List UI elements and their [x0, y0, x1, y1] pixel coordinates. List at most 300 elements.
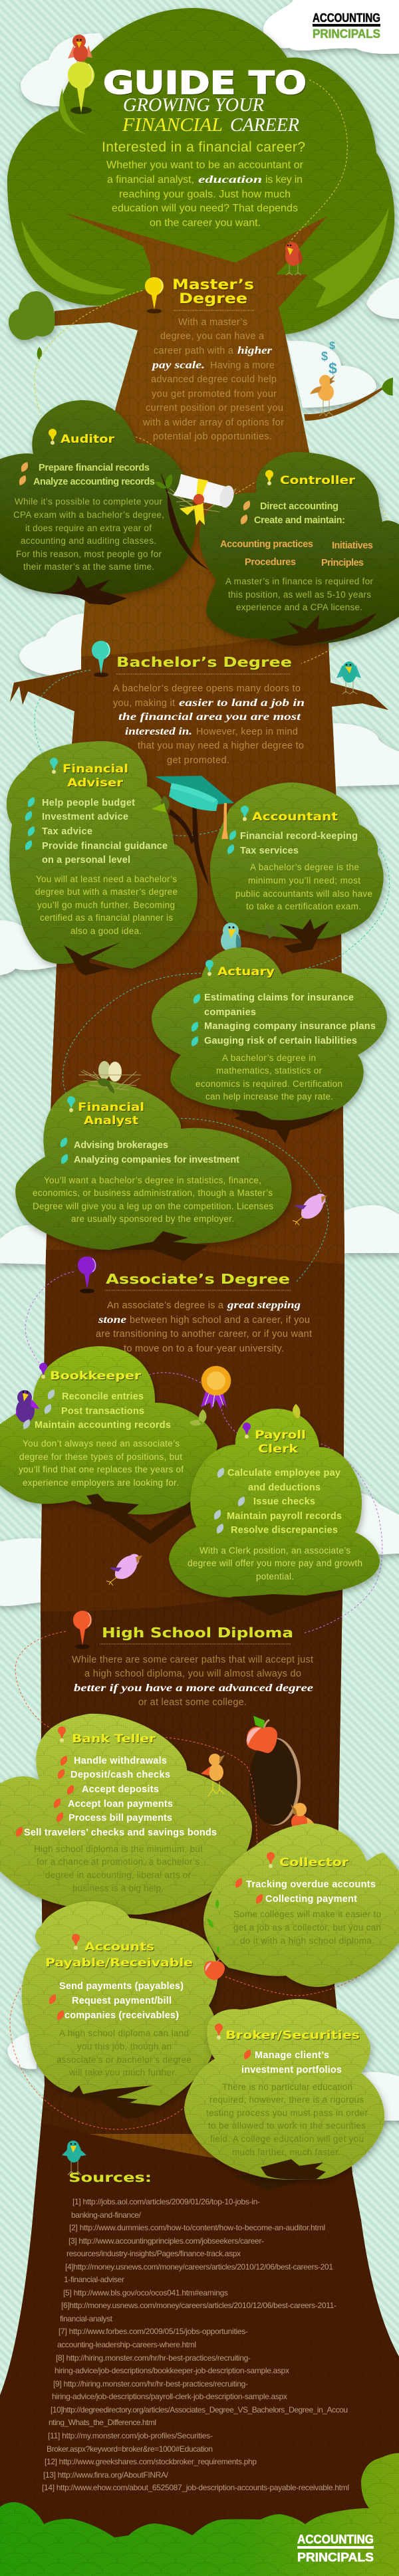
heading: Bachelor’s Degree [116, 654, 292, 670]
body text [113, 683, 305, 766]
icon: purple bird [16, 1390, 40, 1423]
body text: great stepping [227, 1300, 301, 1311]
icon: diploma on nest [155, 474, 236, 525]
sub-items: Principles [321, 558, 364, 568]
logo: bottom: PRINCIPALS [297, 2551, 374, 2564]
body text: public accountants will also have [235, 889, 372, 899]
body text: required; however, there is a rigorous [209, 2095, 364, 2105]
heading: Adviser [67, 776, 124, 790]
body text: interested in. [125, 726, 192, 737]
body text: However, keep in mind [196, 727, 298, 737]
bullets [49, 1981, 184, 2021]
foliage [7, 741, 198, 975]
body text: to move on to a four-year university. [124, 1344, 284, 1354]
heading: High School Diploma [102, 1625, 293, 1641]
text: master's body: With a master’s [178, 317, 247, 328]
icon: teal pin [92, 641, 110, 677]
body text: do it with a high school diploma. [240, 1936, 374, 1946]
heading: Analyst [84, 1114, 138, 1127]
panel: actuary [152, 923, 387, 1143]
foliage [0, 400, 196, 605]
bullets: Collecting payment [265, 1894, 357, 1905]
sources list: banking-and-finance/ [71, 2210, 142, 2220]
bird: teal on bush [221, 923, 241, 952]
sub-items: Accounting practices [220, 539, 313, 550]
sources list: financial-analyst [60, 2314, 113, 2323]
body text: to be allowed to work in the securities [208, 2121, 366, 2131]
sources list: [9] http://hiring.monster.com/hr/hr-best-practices/recruiting- [53, 2379, 248, 2389]
sources list: nting_Whats_the_Difference.html [49, 2418, 156, 2427]
canopy: top tree foliage [7, 8, 394, 334]
icon: small orange pin [267, 1852, 275, 1868]
body text: experience employers are looking for. [23, 1478, 179, 1488]
heading: Bank Teller [72, 1732, 156, 1745]
leaves [190, 1409, 206, 1425]
sources list [42, 2197, 349, 2492]
sub-items [220, 539, 373, 568]
bullets [23, 1389, 171, 1431]
heading [63, 762, 128, 790]
body text: that you may need a higher degree to [138, 741, 304, 751]
icon: graduation cap [152, 776, 234, 886]
sources list: [3] http://www.accountingprinciples.com/jobseekers/career- [68, 2236, 264, 2246]
bullets: Advising brokerages [74, 1140, 168, 1151]
foliage [184, 1999, 384, 2180]
icon: small orange pin [58, 1726, 66, 1742]
bird: orange with dollar signs: $ [329, 360, 337, 377]
icon: apple [247, 1716, 277, 1753]
panel: financial analyst [15, 1061, 291, 1261]
body text: accounting and auditing classes. [21, 536, 156, 546]
panel: collector [203, 1803, 399, 1987]
bullets: on a personal level [42, 855, 130, 866]
body text: minimum you’ll need; most [248, 876, 360, 885]
body text: While there are some career paths that will accept just [72, 1655, 313, 1665]
bullets: Help people budget [42, 798, 135, 808]
body text: between high school and a career, if you [130, 1315, 310, 1326]
bird: orange on bush [201, 1754, 225, 1796]
panel: bank teller [0, 1714, 252, 1915]
title: FINANCIAL [122, 115, 223, 136]
panel: broker/securities [184, 1999, 384, 2190]
bird: pink flying lower [106, 1554, 142, 1585]
bullets: Tracking overdue accounts [246, 1879, 376, 1890]
heading: controller: Controller [280, 474, 356, 487]
heading: Accountant [252, 810, 338, 824]
body text [35, 874, 178, 936]
body text: are transitioning to another career, or if you want [96, 1329, 312, 1340]
foliage [210, 782, 384, 953]
bullets: Manage client’s [255, 2050, 329, 2061]
foliage [200, 452, 399, 645]
body text [33, 1175, 273, 1224]
bullets: Accept deposits [82, 1784, 159, 1795]
body text: stone [98, 1314, 126, 1326]
small left tree on branch [9, 291, 55, 340]
body text: A bachelor’s degree opens many doors to [113, 683, 301, 694]
body text: CPA exam with a bachelor’s degree, [13, 510, 164, 520]
panel: accountant [210, 782, 384, 953]
sources list: [4]http://money.usnews.com/money/careers/articles/2010/12/06/best-careers-201 [65, 2262, 333, 2272]
body text: field. A college education will get you [210, 2134, 364, 2144]
branch fork [81, 1494, 191, 1544]
bullets: Tax advice [42, 826, 92, 837]
heading: master's degree: Degree [179, 291, 247, 306]
body text [188, 1546, 362, 1581]
logo: top: ACCOUNTING [313, 11, 380, 25]
text: master's body: with a wider array of options for [142, 417, 284, 428]
bullets: investment portfolios [241, 2065, 342, 2075]
bullets: Issue checks [253, 1496, 315, 1507]
icon: small teal pin [67, 1096, 75, 1112]
body text: With a Clerk position, an associate’s [200, 1546, 350, 1556]
sources list: [6]http://money.usnews.com/money/careers/articles/2010/12/06/best-careers-2011- [61, 2301, 336, 2310]
bird: orange and red [291, 1803, 315, 1843]
body text [196, 1053, 342, 1102]
body text: You will at least need a bachelor’s [36, 874, 177, 884]
icon: yellow pin [145, 277, 164, 314]
heading: Payable/Receivable [45, 1956, 193, 1969]
icon: nest with eggs [78, 1061, 141, 1094]
foliage [152, 947, 387, 1143]
sub-items: Initiatives [332, 540, 373, 551]
section: associate's degree [78, 1256, 312, 1354]
bird: orange with dollar signs: $ [321, 350, 328, 363]
heading: auditor: Auditor [61, 433, 115, 445]
sources list: [7] http://www.forbes.com/2009/05/15/jobs-opportunities- [59, 2327, 248, 2336]
body text: or at least some college. [138, 1697, 247, 1708]
section: bachelor's degree [92, 641, 305, 766]
sources list: [8] http://hiring.monster.com/hr/hr-best-practices/recruiting- [56, 2353, 251, 2363]
bullets: Prepare financial records [39, 463, 150, 473]
heading: Broker/Securities [225, 2029, 360, 2042]
body text: also a good idea. [70, 926, 142, 936]
icon: orange pin [73, 1611, 92, 1649]
bullets: Process bill payments [68, 1813, 172, 1823]
body text [13, 497, 164, 572]
title: CAREER [230, 115, 299, 136]
panel: auditor [0, 400, 209, 605]
body text: are usually sponsored by the employer. [71, 1214, 234, 1224]
body text: to take a certification exam. [246, 901, 361, 911]
panel: controller [200, 452, 399, 645]
body text: For this reason, most people go for [16, 549, 162, 559]
body text: a high school diploma, you will almost always do [84, 1669, 301, 1679]
bullets: Estimating claims for insurance [204, 993, 354, 1003]
bullets: Resolve discrepancies [231, 1525, 338, 1536]
intro text: Interested in a financial career? [102, 140, 305, 155]
bullets [241, 501, 345, 526]
tassel [221, 803, 228, 839]
body text: While it’s possible to complete your [15, 497, 162, 507]
body text [34, 1844, 203, 1893]
heading: Financial [63, 762, 128, 776]
intro text [102, 140, 305, 229]
body text: testing process you must pass in order [206, 2108, 368, 2118]
body text [225, 576, 374, 612]
body text: you, making it [113, 698, 175, 709]
logo: bottom [297, 2533, 374, 2564]
panel: accounts payable/receivable [22, 1901, 217, 2119]
logo: top [313, 11, 380, 41]
bullets: Post transactions [61, 1406, 144, 1417]
body text: much farther, much faster. [232, 2147, 340, 2157]
sub-items: Procedures [245, 557, 296, 568]
heading: Bookkeeper [50, 1369, 142, 1383]
body text: their master’s at the same time. [23, 562, 154, 572]
intro text: is key in [265, 174, 303, 185]
bullets: companies [204, 1007, 256, 1018]
bullets [214, 1468, 342, 1536]
bullets: Tax services [240, 846, 299, 856]
body text [57, 2028, 192, 2077]
icon: small teal pin [205, 960, 213, 976]
bullets: Investment advice [42, 812, 128, 822]
icon: small yellow pin [265, 470, 273, 485]
sources list: hiring-advice/job-descriptions/bookkeeper-job-description-sample.aspx [55, 2366, 289, 2375]
bird: pink flying [293, 1194, 327, 1225]
ground foliage [0, 2453, 399, 2576]
body text: A bachelor’s degree is the [250, 862, 359, 872]
body text [233, 1909, 381, 1946]
body text: economics is required. Certification [196, 1079, 342, 1089]
section: high school diploma [72, 1611, 313, 1708]
body text: business is a big help. [72, 1883, 164, 1893]
fork behind [234, 2159, 326, 2190]
foliage [22, 1901, 217, 2119]
branch fork [231, 1593, 341, 1615]
bird: orange with dollar signs [310, 340, 337, 416]
body text: experience and a CPA license. [236, 602, 362, 612]
body text: get a job as a collector, but you can [233, 1923, 381, 1932]
heading: Clerk [258, 1443, 299, 1456]
intro text: Whether you want to be an accountant or [106, 160, 304, 171]
panel: bookkeeper [0, 1346, 231, 1544]
purple dashed route [25, 1272, 382, 1633]
bird: red on top pin [68, 35, 92, 65]
body text: associate’s or bachelor’s degree [57, 2055, 192, 2065]
body text: degree for these types of positions, but [19, 1452, 182, 1462]
icon: lime pin [68, 62, 94, 114]
bullets [241, 2049, 342, 2075]
text: master's body: pay scale. [151, 360, 205, 371]
body text: easier to land a job in [179, 697, 305, 709]
bullets: Request payment/bill [72, 1996, 172, 2006]
heading [45, 1940, 193, 1969]
heading [78, 1101, 144, 1127]
heading: Associate’s Degree [106, 1271, 290, 1287]
body text [206, 2082, 368, 2157]
bullets: Maintain payroll records [227, 1511, 342, 1522]
intro text: reaching your goals. Just how much [119, 189, 291, 200]
sources list: [11] http://my.monster.com/job-profiles/Securities- [48, 2431, 213, 2440]
leaf [293, 1404, 301, 1419]
bullets: and deductions [248, 1482, 321, 1493]
intro text: education will you need? That depends [112, 203, 298, 214]
panel: payroll clerk [169, 1404, 380, 1615]
sources list: hiring-advice/job-descriptions/payroll-clerk-job-description-sample.aspx [52, 2392, 287, 2401]
leaves: green small [207, 1899, 219, 1953]
body text: for a chance at promotion, a bachelor’s [37, 1857, 200, 1867]
body text: degree will offer you more pay and growth [188, 1558, 362, 1568]
body text [19, 1439, 184, 1488]
heading: Collector [279, 1856, 349, 1869]
body text: An associate’s degree is a [107, 1300, 224, 1311]
teal dashed route [35, 670, 390, 1282]
bullets: Financial record-keeping [240, 831, 358, 842]
body text: you’ll find that one replaces the years of [19, 1464, 184, 1474]
bullets [227, 830, 358, 856]
bullets: Send payments (payables) [59, 1981, 184, 1992]
bullets: Analyzing companies for investment [74, 1155, 239, 1165]
foliage [0, 1346, 217, 1514]
body text: mathematics, statistics or [216, 1066, 322, 1076]
body text: better if you have a more advanced degree [74, 1683, 313, 1694]
sources list: accounting-leadership-careers-where.html [57, 2340, 196, 2349]
body text: potential. [256, 1572, 294, 1581]
right twig with leaf [304, 378, 393, 421]
text: master's body: higher [237, 345, 273, 356]
sources list: [2] http://www.dummies.com/how-to/content/how-to-become-an-auditor.html [69, 2223, 325, 2232]
bullets [61, 1137, 239, 1165]
bullets [25, 797, 168, 866]
bullets: Accept loan payments [68, 1799, 173, 1810]
intro text: education [198, 174, 262, 185]
foliage [0, 1714, 252, 1915]
body text [235, 862, 372, 911]
heading: Payroll [255, 1429, 306, 1442]
text: master's body: you get promoted from your [152, 389, 277, 400]
body text: get promoted. [167, 755, 229, 766]
bullets: Handle withdrawals [74, 1756, 167, 1766]
body text: degree but with a master’s degree [35, 887, 178, 897]
panel: financial adviser [7, 741, 234, 975]
icon: small purple pin [39, 1363, 47, 1379]
heading: master's degree: Master’s [172, 277, 254, 293]
bullets: Direct accounting [260, 501, 338, 512]
body text: certified as a financial planner is [40, 913, 173, 923]
sources list: Broker.aspx?keyword=broker&re=1000#Education [47, 2444, 213, 2454]
body text: Degree will give you a leg up on the competition. Licenses [33, 1201, 273, 1211]
bird: teal at sources [62, 2141, 86, 2175]
icon: small orange pin [215, 2024, 223, 2040]
heading: Accounts [84, 1940, 154, 1953]
logo: top: PRINCIPALS [313, 27, 380, 41]
body text: this position, as well as 5-10 years [228, 590, 371, 600]
body text [96, 1300, 312, 1354]
body text: it does require an extra year of [25, 523, 152, 533]
logo: bottom: ACCOUNTING [297, 2533, 374, 2546]
sources list: [5] http://www.bls.gov/oco/ocos041.htm#earnings [63, 2288, 228, 2297]
foliage [169, 1409, 380, 1597]
bullets: companies (receivables) [65, 2010, 179, 2021]
body text: will take you much further. [68, 2067, 177, 2077]
icon: small orange pin [72, 1934, 80, 1950]
bullets: Create and maintain: [254, 515, 345, 526]
sources list: [10]http://degreedirectory.org/articles/Associates_Degree_VS_Bachelors_Degree_in_Accou [51, 2405, 348, 2414]
sources list: [13] http://www.finra.org/AboutFINRA/ [43, 2470, 169, 2480]
bullets [235, 1878, 376, 1905]
text: master's body: career path with a [154, 346, 234, 356]
bullets: Calculate employee pay [227, 1468, 340, 1478]
icon: small teal pin [241, 806, 249, 821]
text: master's body [142, 317, 284, 442]
bullets: Provide financial guidance [42, 841, 168, 852]
intro text: on the career you want. [150, 217, 261, 229]
title [103, 65, 307, 136]
foliage [15, 1080, 291, 1261]
body text: degree in accounting, liberal arts or [45, 1870, 192, 1880]
title: GUIDE TO [103, 65, 307, 102]
body text: you’ll go much further. Becoming [37, 900, 175, 910]
bullets: Managing company insurance plans [204, 1021, 376, 1032]
body text: economics, or business administration, though a Master’s [33, 1188, 273, 1198]
text: master's body: current position or present you [146, 403, 283, 413]
sources list: resources/industry-insights/Pages/finance-track.aspx [66, 2249, 241, 2258]
section: master's degree [142, 277, 284, 442]
bullets: Reconcile entries [62, 1391, 144, 1402]
foliage [203, 1823, 399, 1987]
heading: Actuary [217, 965, 275, 979]
sources list: 1-financial-adviser [64, 2275, 124, 2284]
icon: small teal pin [50, 758, 58, 774]
sources list: [14] http://www.ehow.com/about_6525087_job-description-accounts-payable-receivable.html [42, 2483, 349, 2492]
bullets: Sell travelers’ checks and savings bonds [24, 1827, 217, 1838]
body text: A master’s in finance is required for [225, 576, 374, 586]
bullets: Maintain accounting records [35, 1420, 171, 1431]
bullets [16, 1756, 217, 1838]
heading: Financial [78, 1101, 144, 1114]
body text: the financial area you are most [118, 711, 301, 723]
body text: High school diploma is the minimum, but [34, 1844, 203, 1854]
bullets [19, 462, 155, 487]
bird: orange with dollar signs: $ [329, 340, 335, 352]
bullets: Gauging risk of certain liabilities [204, 1036, 357, 1046]
body text: You don’t always need an associate’s [23, 1439, 180, 1449]
body text: Some colleges will make it easier to [233, 1909, 381, 1919]
intro text: a financial analyst, [107, 174, 194, 185]
bullets: Analyze accounting records [33, 477, 155, 487]
title: GROWING YOUR [123, 95, 264, 116]
sources list: [12] http://www.greekshares.com/stockbroker_requirements.php [45, 2457, 257, 2466]
icon: purple pin [78, 1256, 96, 1294]
orange dashed route [10, 1631, 396, 2129]
heading: master's degree [172, 277, 254, 306]
body text: you this job, though an [77, 2042, 172, 2051]
heading [255, 1429, 306, 1456]
body text: A bachelor’s degree in [222, 1053, 316, 1063]
sources heading: Sources: [68, 2170, 152, 2185]
bird: teal on branch [336, 661, 361, 694]
yellow dashed route [35, 80, 396, 663]
body text: You’ll want a bachelor’s degree in statistics, finance, [44, 1175, 261, 1185]
sources list: [1] http://jobs.aol.com/articles/2009/01/26/top-10-jobs-in- [72, 2197, 260, 2206]
body text [72, 1655, 313, 1708]
body text: A high school diploma can land [59, 2028, 189, 2038]
text: master's body: advanced degree could help [151, 374, 277, 385]
branch behind [160, 472, 209, 570]
icon: small purple pin [243, 1423, 251, 1439]
text: master's body: Having a more [210, 360, 275, 371]
icon: tree hole [249, 1738, 301, 1825]
body text: can help increase the pay rate. [205, 1092, 333, 1102]
bullets: Deposit/cash checks [70, 1770, 170, 1780]
icon: small yellow pin [49, 429, 57, 445]
falling leaf [37, 347, 42, 360]
body text: There is no particular education [222, 2082, 352, 2092]
text: master's body: degree, you can have a [160, 331, 265, 342]
icon: small apple [204, 1958, 225, 1980]
